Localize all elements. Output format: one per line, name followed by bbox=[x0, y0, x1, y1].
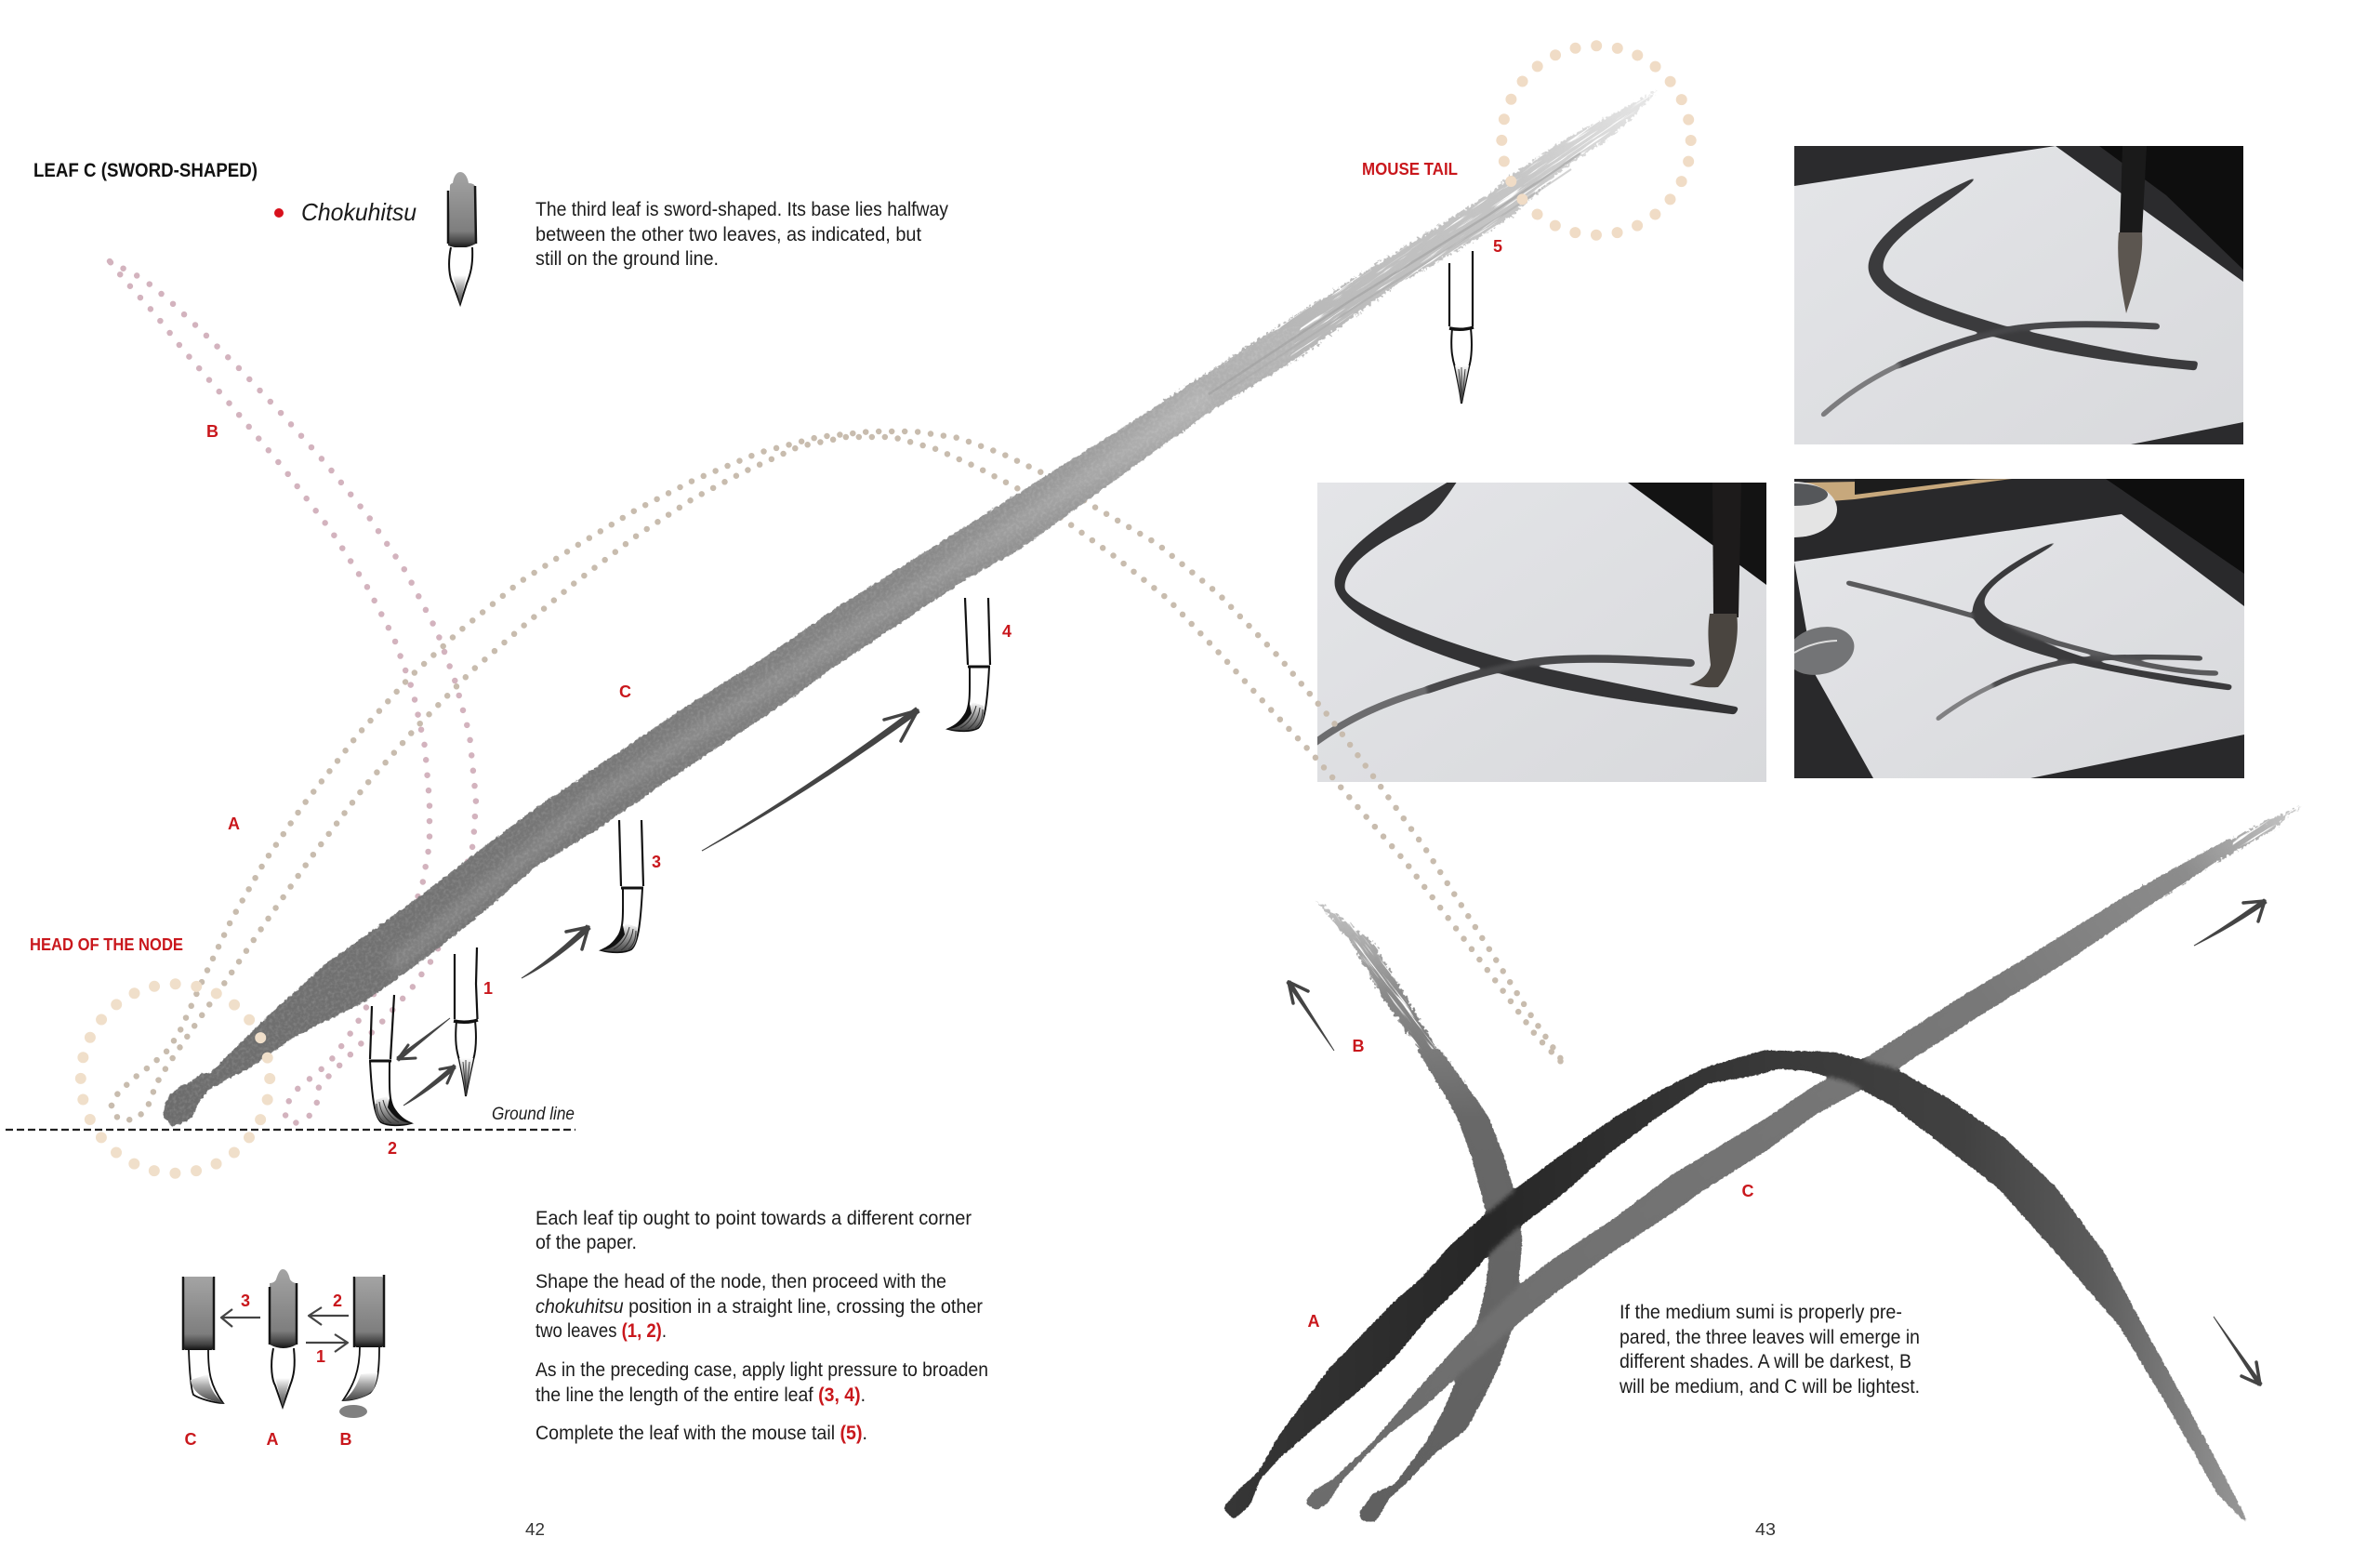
instructions text: Complete the leaf with the mouse tail (5). bbox=[536, 1423, 867, 1444]
photo: three leaves completed bbox=[1752, 479, 2244, 778]
arrow 2 bbox=[309, 1307, 349, 1325]
page number 42: 42 bbox=[525, 1520, 545, 1539]
dry mouse-tail end of stroke bbox=[1001, 0, 1818, 667]
brush step 2 bbox=[369, 995, 411, 1158]
leaf A stroke bbox=[1223, 1051, 2250, 1527]
brush A bbox=[270, 1269, 297, 1407]
dotted circle: mouse tail bbox=[1501, 46, 1691, 235]
instructions text bbox=[536, 1208, 988, 1444]
photo: brush lifted after second stroke bbox=[1311, 474, 1766, 782]
brush step 5 bbox=[1449, 237, 1502, 404]
dotted circle: head of the node bbox=[81, 984, 270, 1173]
shades explanation text: If the medium sumi is properly pre- bbox=[1620, 1302, 1902, 1323]
arrow number 2: 2 bbox=[333, 1292, 342, 1310]
brush C bbox=[183, 1277, 223, 1403]
main brush stroke: leaf C bbox=[163, 0, 1818, 1127]
label: mouse tail: MOUSE TAIL bbox=[1362, 160, 1458, 179]
finished leaves artwork bbox=[1223, 720, 2354, 1527]
leaf C stroke bbox=[1305, 838, 2233, 1510]
label: leaf B: B bbox=[1352, 1037, 1365, 1055]
instructions text: As in the preceding case, apply light pressure to broaden bbox=[536, 1359, 988, 1381]
instructions text: Each leaf tip ought to point towards a different corner bbox=[536, 1208, 972, 1229]
label: head of the node: HEAD OF THE NODE bbox=[30, 935, 183, 954]
brush position name: Chokuhitsu bbox=[301, 198, 416, 226]
instructions text: chokuhitsu position in a straight line, crossing the other bbox=[536, 1296, 983, 1318]
photo: brush above finished strokes bbox=[1794, 146, 2243, 444]
ground line label: Ground line bbox=[492, 1105, 575, 1124]
brush label C: C bbox=[184, 1430, 197, 1449]
intro paragraph: still on the ground line. bbox=[536, 248, 719, 270]
label: C guide: C bbox=[619, 682, 631, 701]
label: leaf A: A bbox=[1307, 1312, 1320, 1331]
arrow 1 bbox=[306, 1334, 348, 1352]
shades explanation text: pared, the three leaves will emerge in bbox=[1620, 1327, 1920, 1348]
arrow: step 3 to 4 bbox=[702, 708, 919, 851]
brush label A: A bbox=[266, 1430, 279, 1449]
diagram: brush movement bbox=[183, 1269, 384, 1449]
leaf B dry tip bbox=[1224, 826, 1560, 1164]
arrow: leaf B direction bbox=[1287, 981, 1334, 1051]
shades explanation text bbox=[1619, 1302, 1920, 1398]
icon: chokuhitsu brush bbox=[448, 172, 476, 304]
arrow: leaf A direction bbox=[2214, 1317, 2262, 1385]
brush step 3 bbox=[602, 820, 661, 952]
arrow number 1: 1 bbox=[316, 1347, 325, 1366]
arrow: step 1 to 2 bbox=[397, 1018, 450, 1061]
leaf B stroke bbox=[1359, 1049, 1522, 1521]
brush label B: B bbox=[340, 1430, 351, 1449]
red bullet bbox=[274, 208, 284, 218]
leaf C dry tip bbox=[2057, 720, 2354, 1010]
page number 43: 43 bbox=[1755, 1520, 1776, 1539]
arrow 3 bbox=[221, 1309, 260, 1327]
arrow: step 1 to 3 bbox=[522, 925, 590, 978]
intro paragraph bbox=[536, 199, 948, 270]
label: A guide: A bbox=[228, 815, 240, 833]
arrow number 3: 3 bbox=[241, 1292, 250, 1310]
step number 1: 1 bbox=[483, 979, 493, 998]
label: leaf C: C bbox=[1742, 1182, 1753, 1200]
step number 2: 2 bbox=[388, 1139, 397, 1158]
shades explanation text: will be medium, and C will be lightest. bbox=[1619, 1376, 1920, 1398]
step number 3: 3 bbox=[652, 853, 661, 871]
instructions text: two leaves (1, 2). bbox=[536, 1320, 667, 1342]
instructions text: Shape the head of the node, then proceed with the bbox=[536, 1271, 946, 1292]
arrow: leaf C direction bbox=[2194, 899, 2267, 946]
intro paragraph: The third leaf is sword-shaped. Its base lies halfway bbox=[536, 199, 948, 220]
dotted guide: leaf A bbox=[112, 431, 1567, 1120]
intro paragraph: between the other two leaves, as indicated, but bbox=[536, 224, 921, 245]
brush step 1 bbox=[454, 947, 493, 1096]
dotted guide: leaf B bbox=[110, 261, 476, 1123]
brush step 4 bbox=[948, 598, 1012, 731]
ground line bbox=[6, 1129, 575, 1131]
step number 4: 4 bbox=[1002, 622, 1012, 641]
label: B guide: B bbox=[206, 422, 218, 441]
title: LEAF C (SWORD-SHAPED) bbox=[33, 160, 258, 181]
instructions text: the line the length of the entire leaf (3, 4). bbox=[536, 1384, 866, 1406]
instructions text: of the paper. bbox=[536, 1232, 637, 1253]
arrow: step 2 to 1 bbox=[403, 1065, 456, 1106]
step number 5: 5 bbox=[1493, 237, 1502, 256]
brush B bbox=[339, 1275, 384, 1418]
shades explanation text: different shades. A will be darkest, B bbox=[1620, 1351, 1911, 1372]
